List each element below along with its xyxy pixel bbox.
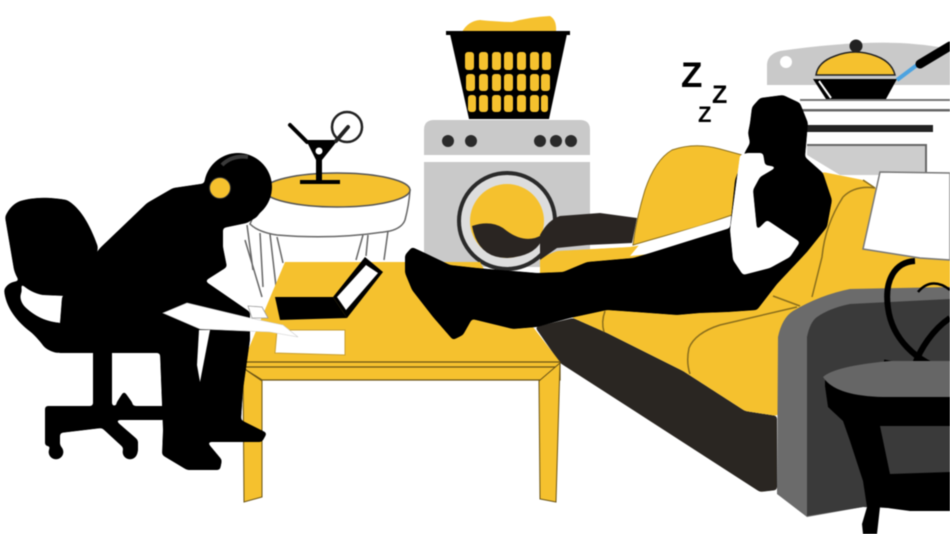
- laundry basket with clothes: [446, 16, 570, 119]
- seated man silhouette: [57, 153, 298, 470]
- washing machine: [424, 120, 590, 269]
- white arm: [730, 153, 800, 275]
- pot with yellow lid: [813, 40, 897, 99]
- stove: [767, 43, 950, 175]
- sleeping Z letters: [681, 56, 727, 127]
- sleeping Z letters: Z: [681, 56, 702, 95]
- white band under pillow: [630, 216, 732, 256]
- laptop: [275, 257, 383, 320]
- sleeping Z letters: Z: [712, 81, 727, 109]
- dark pillow: [540, 213, 637, 260]
- coffee table: [243, 262, 560, 502]
- lamp shade: [863, 172, 950, 260]
- lamp base: [884, 261, 950, 372]
- martini glass and olive pick: [290, 112, 362, 184]
- sofa cushions: [540, 172, 950, 416]
- office chair: [4, 198, 165, 459]
- end table: [823, 361, 950, 534]
- gap between legs: [197, 330, 210, 382]
- grey armchair: [777, 287, 950, 517]
- side table: [245, 173, 410, 297]
- headphones: [210, 157, 248, 198]
- sleeping Z letters: Z: [698, 102, 711, 127]
- blowtorch flame and handle: [897, 46, 950, 80]
- yellow pillow: [633, 146, 742, 245]
- sofa base: [535, 318, 777, 492]
- reclining man silhouette: [405, 95, 832, 340]
- white forearm and hand: [163, 303, 298, 337]
- paper on table: [275, 330, 345, 355]
